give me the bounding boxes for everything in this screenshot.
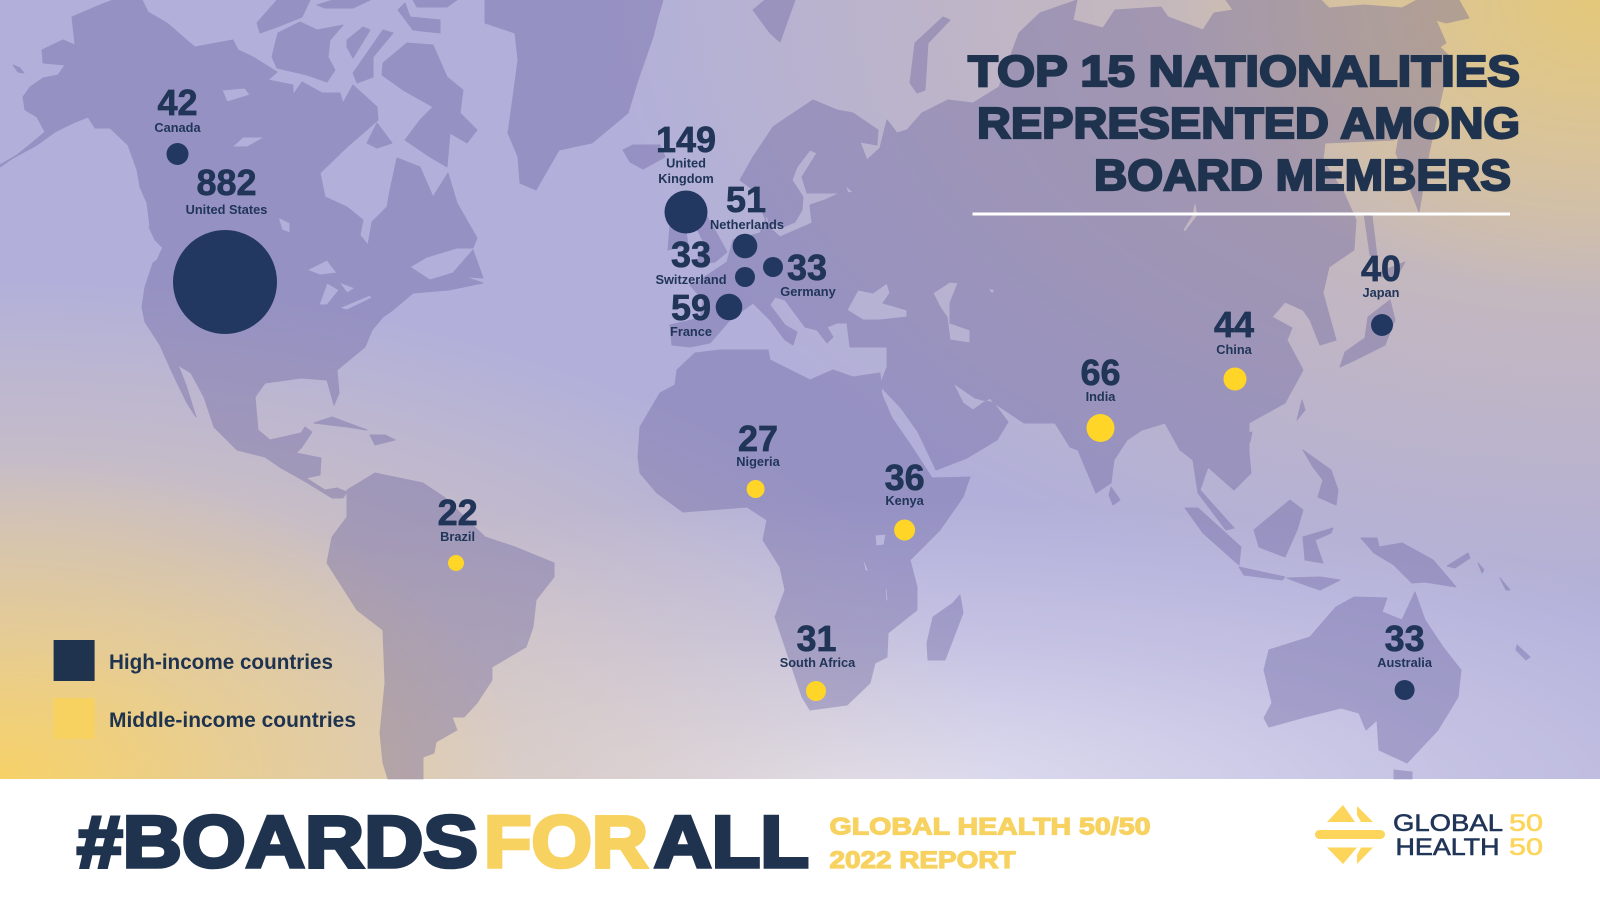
legend label: middle-income: Middle-income countries <box>109 709 356 732</box>
title underline <box>972 212 1510 216</box>
data point: Brazil: Brazil <box>440 529 475 544</box>
data point: United States: 882 <box>196 162 257 203</box>
data point: United States <box>173 162 277 334</box>
Novaya Zemlya, Sakhalin, Japan, Taiwan, Hainan, Sri Lanka <box>910 17 1405 505</box>
data point: Netherlands: 51 <box>726 179 766 220</box>
data point: Switzerland <box>655 234 755 287</box>
data point: Germany: Germany <box>780 284 837 299</box>
data point: France: France <box>670 324 712 339</box>
data point: Canada: Canada <box>154 120 201 135</box>
data point: France: 59 <box>671 287 711 328</box>
data point: United Kingdom <box>656 119 716 234</box>
data point: Canada: 42 <box>157 82 198 123</box>
data point: United Kingdom: 149 <box>656 119 716 160</box>
hashtag heading: #BOARDS <box>77 802 478 883</box>
legend swatch: middle-income <box>54 698 95 739</box>
data point: Japan <box>1361 248 1401 336</box>
data point: France <box>670 287 742 339</box>
logo icon <box>1315 805 1385 864</box>
title <box>968 47 1520 200</box>
Greenland <box>485 0 663 190</box>
data point: Kenya: 36 <box>885 457 925 498</box>
Australia, Tasmania, New Zealand <box>1264 592 1530 779</box>
data point: Switzerland: 33 <box>671 234 711 275</box>
title: REPRESENTED AMONG <box>977 99 1520 148</box>
data point: China: China <box>1216 342 1253 357</box>
South America and Caribbean <box>314 417 554 779</box>
data point: Kenya: Kenya <box>885 493 925 508</box>
data point: Canada <box>154 82 201 165</box>
data point: Germany <box>763 247 837 299</box>
data point: South Africa: 31 <box>796 618 837 659</box>
hashtag heading <box>77 802 809 883</box>
data point: United Kingdom: United <box>666 156 706 170</box>
data point: United Kingdom: Kingdom <box>658 171 714 186</box>
data point: Kenya <box>885 457 925 540</box>
data point: South Africa: South Africa <box>780 655 856 670</box>
Maritime Southeast Asia and New Guinea <box>1185 450 1510 590</box>
Arctic islands and Newfoundland <box>13 0 483 278</box>
report caption: GLOBAL HEALTH 50/50 <box>830 814 1150 840</box>
data point: Japan: Japan <box>1362 285 1400 300</box>
data point: Nigeria: 27 <box>738 418 778 459</box>
title: BOARD MEMBERS <box>1094 151 1511 200</box>
hashtag heading: FOR <box>484 802 648 883</box>
data point: United States: United States <box>186 202 267 217</box>
data point: Germany: 33 <box>787 247 827 288</box>
data point: Australia <box>1377 618 1433 700</box>
data point: China: 44 <box>1214 304 1254 345</box>
legend <box>54 640 356 739</box>
hashtag heading: ALL <box>654 802 809 883</box>
footer band <box>0 779 1600 900</box>
legend swatch: high-income <box>54 640 95 681</box>
data point: India: 66 <box>1080 352 1121 393</box>
report caption <box>830 814 1150 874</box>
logo: Global Health 50/50: 50 <box>1509 810 1543 837</box>
logo: Global Health 50/50 <box>1315 805 1543 864</box>
data point: India: India <box>1086 389 1116 404</box>
data point: Japan: 40 <box>1361 248 1401 289</box>
logo wordmark: GLOBAL <box>1393 810 1503 837</box>
Eurasia <box>670 0 1469 530</box>
data point: Nigeria <box>736 418 781 498</box>
Africa and Madagascar <box>638 350 970 710</box>
legend label: high-income: High-income countries <box>109 651 333 674</box>
North America <box>0 0 483 498</box>
title: TOP 15 NATIONALITIES <box>968 47 1520 96</box>
data point: Netherlands <box>710 179 784 258</box>
data point: Australia: Australia <box>1377 655 1433 670</box>
data point: Brazil <box>438 492 478 571</box>
data point: South Africa <box>780 618 856 701</box>
logo: Global Health 50/50: HEALTH <box>1396 834 1500 861</box>
Iceland, Svalbard, British Isles <box>623 0 795 265</box>
logo: Global Health 50/50: 50 <box>1509 834 1543 861</box>
data point: India <box>1080 352 1121 442</box>
data point: Nigeria: Nigeria <box>736 454 781 469</box>
data point: Brazil: 22 <box>438 492 478 533</box>
data point: Australia: 33 <box>1385 618 1425 659</box>
data point: Netherlands: Netherlands <box>710 217 784 232</box>
data point: China <box>1214 304 1254 390</box>
data point: Switzerland: Switzerland <box>655 272 727 287</box>
report caption: 2022 REPORT <box>830 847 1016 874</box>
